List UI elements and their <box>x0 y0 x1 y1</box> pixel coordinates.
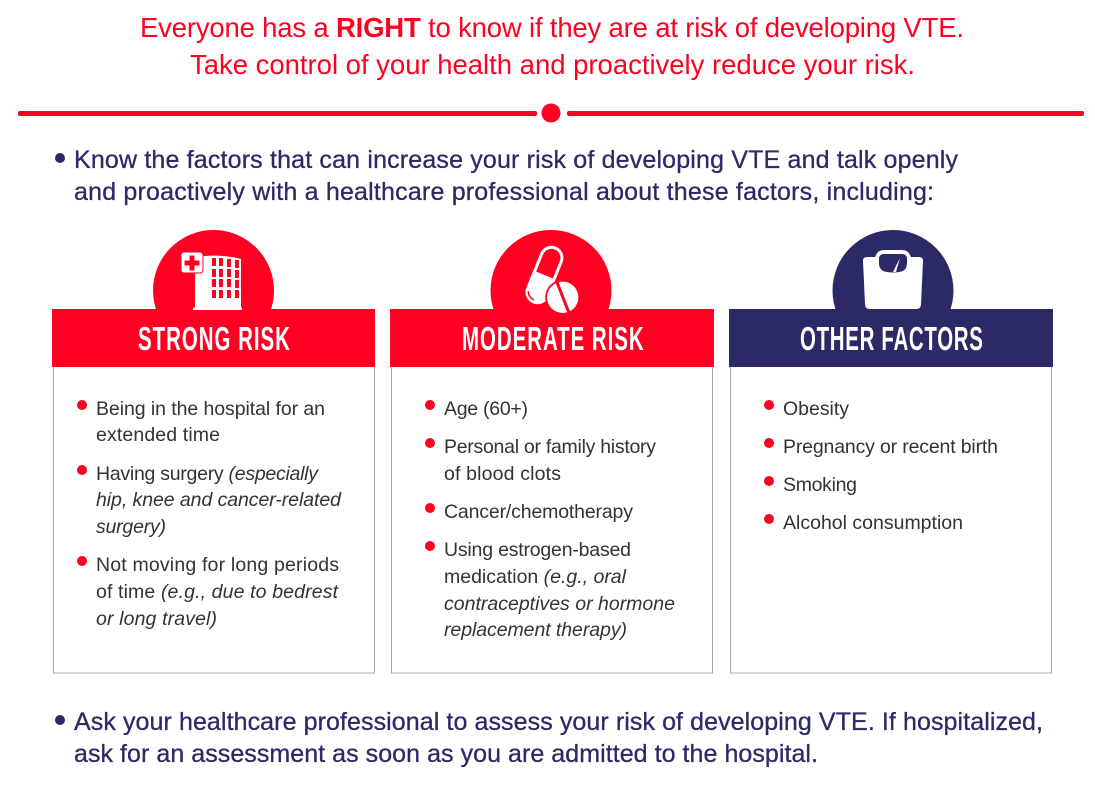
list: moderate risk: replacement therapy) <box>444 619 627 641</box>
closing bullet text: ask for an assessment as soon as you are admitted to the hospital. <box>74 740 818 768</box>
divider with centre dot <box>18 104 1084 122</box>
closing bullet text: Ask your healthcare professional to assess your risk of developing VTE. If hospitalized, <box>74 708 1043 736</box>
panel: strong risk <box>52 230 375 673</box>
icon: weighing scale <box>863 250 923 309</box>
list: moderate risk: contraceptives or hormone <box>444 593 675 615</box>
title: Take control of your health and proactively reduce your risk. <box>190 49 915 80</box>
list: moderate risk: medication (e.g., oral <box>444 566 627 588</box>
list: strong risk: surgery) <box>96 516 166 538</box>
heading: strong risk: STRONG RISK <box>138 320 290 357</box>
heading: moderate risk: MODERATE RISK <box>462 320 644 357</box>
closing bullet text <box>55 708 1043 768</box>
list: moderate risk: of blood clots <box>444 463 561 485</box>
icon: pills <box>522 244 580 315</box>
list: strong risk: extended time <box>96 424 220 446</box>
list: strong risk: Having surgery (especially <box>96 463 319 485</box>
list: strong risk: Being in the hospital for an <box>96 398 325 420</box>
list: other factors: Alcohol consumption <box>783 512 963 534</box>
list: other factors <box>764 398 998 534</box>
list: moderate risk <box>425 398 675 641</box>
list: strong risk: hip, knee and cancer-related <box>96 489 342 511</box>
list: other factors: Smoking <box>783 474 857 496</box>
title: Everyone has a RIGHT to know if they are at risk of developing VTE. <box>140 12 964 43</box>
list: moderate risk: Age (60+) <box>444 398 528 420</box>
list: moderate risk: Personal or family history <box>444 436 656 458</box>
list: strong risk: of time (e.g., due to bedrest <box>96 581 340 603</box>
list: moderate risk: Using estrogen-based <box>444 539 631 561</box>
intro bullet text <box>55 146 958 206</box>
list: moderate risk: Cancer/chemotherapy <box>444 501 633 523</box>
icon: hospital <box>181 252 242 310</box>
title <box>140 12 964 80</box>
list: strong risk: or long travel) <box>96 608 217 630</box>
panel: other factors <box>729 230 1053 673</box>
intro bullet text: and proactively with a healthcare professional about these factors, including: <box>74 178 934 206</box>
intro bullet text: Know the factors that can increase your risk of developing VTE and talk openly <box>74 146 958 174</box>
panel: moderate risk <box>390 230 714 673</box>
heading: other factors: OTHER FACTORS <box>800 320 983 357</box>
list: other factors: Pregnancy or recent birth <box>783 436 998 458</box>
list: strong risk <box>77 398 342 630</box>
list: other factors: Obesity <box>783 398 849 420</box>
list: strong risk: Not moving for long periods <box>96 554 339 576</box>
